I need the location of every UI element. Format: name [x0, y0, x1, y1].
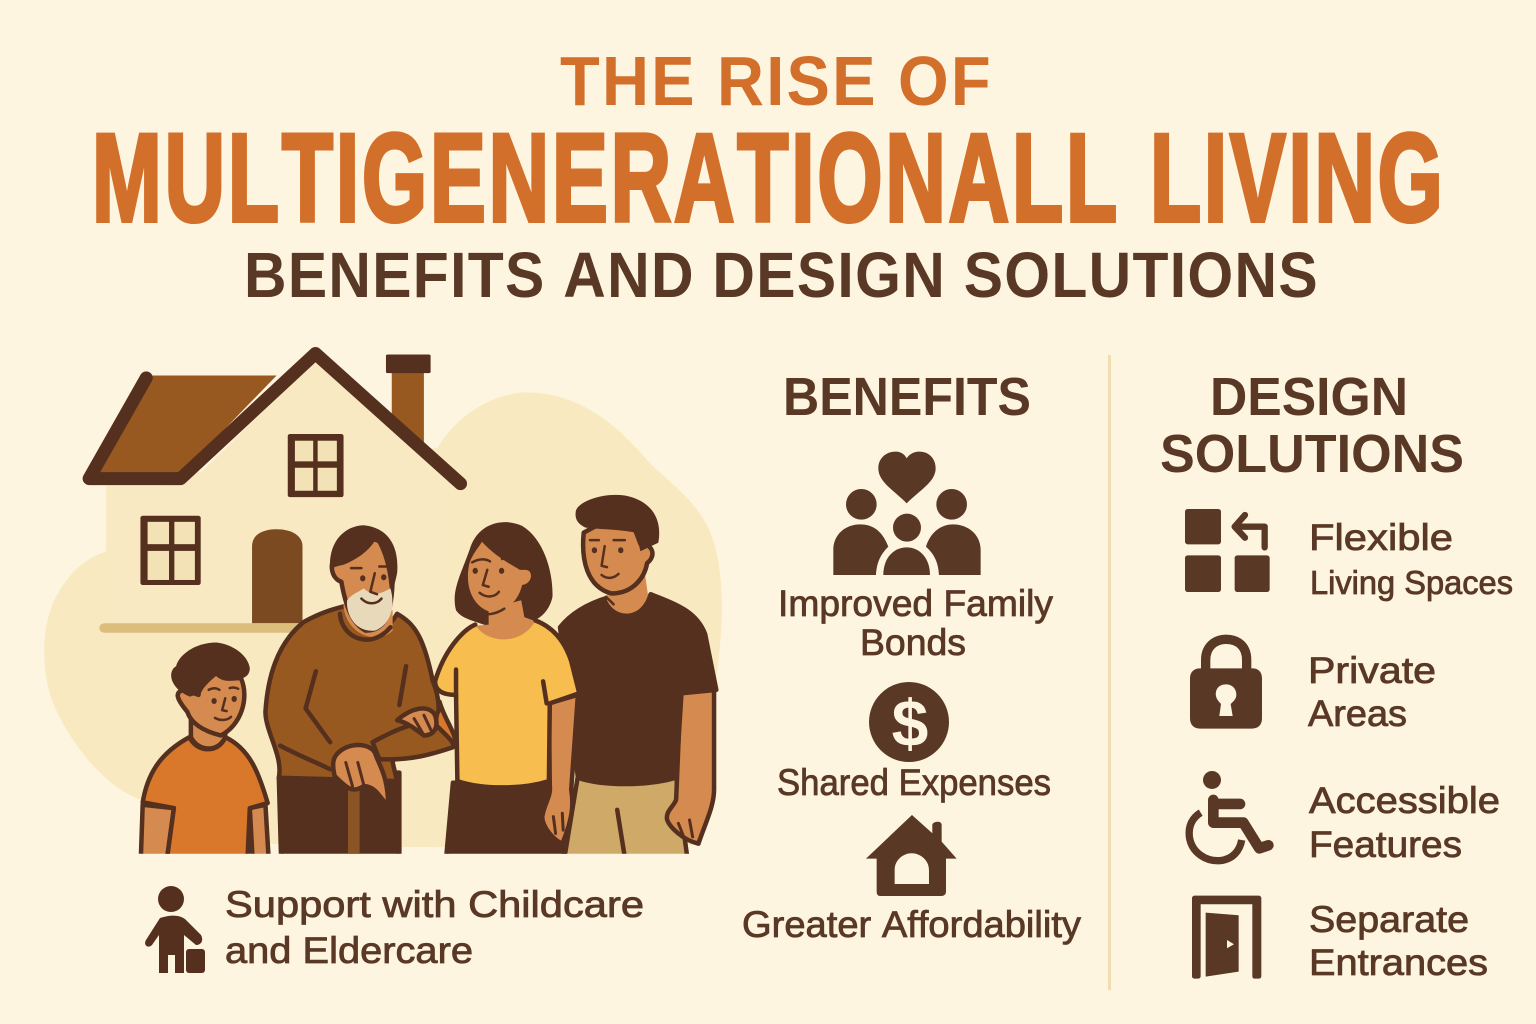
text: improved family bonds: [778, 583, 1054, 663]
title: THE RISE OF: [560, 43, 991, 121]
divider: [1108, 355, 1111, 990]
text: improved family bonds: Bonds: [860, 622, 966, 663]
icon: wheelchair: [1189, 771, 1268, 861]
heading: design solutions: DESIGN: [1210, 367, 1408, 427]
support text: and Eldercare: [225, 930, 473, 971]
icon: house: [866, 815, 957, 896]
text: shared expenses: Shared Expenses: [777, 762, 1051, 803]
house: [87, 354, 461, 633]
heading: design solutions: SOLUTIONS: [1160, 424, 1464, 484]
woman in yellow shirt: [433, 522, 579, 857]
title: BENEFITS AND DESIGN SOLUTIONS: [244, 240, 1318, 312]
text: flexible living spaces: [1309, 517, 1513, 601]
title: LIVING: [1150, 108, 1443, 248]
support text: Support with Childcare: [225, 884, 644, 925]
text: improved family bonds: Improved Family: [778, 583, 1054, 624]
background blob: [44, 392, 722, 848]
text: separate entrances: [1309, 899, 1488, 983]
grandfather with cane: [265, 525, 453, 857]
icon: dollar coin: [869, 682, 949, 762]
text: accessible features: Accessible: [1309, 780, 1500, 821]
icon: dollar coin: $: [892, 686, 928, 760]
text: private areas: Private: [1308, 650, 1436, 691]
icon: family with heart: [833, 452, 981, 575]
text: separate entrances: Separate: [1309, 899, 1469, 940]
heading: benefits: BENEFITS: [783, 367, 1031, 427]
text: private areas: [1308, 650, 1436, 734]
illustration: family and house: [44, 354, 722, 857]
text: flexible living spaces: Living Spaces: [1310, 564, 1513, 601]
icon: padlock: [1190, 639, 1262, 729]
heading: design solutions: [1160, 367, 1464, 484]
text: flexible living spaces: Flexible: [1309, 517, 1453, 558]
icon: flexible spaces: [1185, 509, 1270, 592]
support text: [225, 884, 644, 971]
title: [92, 43, 1443, 312]
text: private areas: Areas: [1308, 693, 1407, 734]
text: greater affordability: Greater Affordability: [742, 904, 1082, 945]
man in dark shirt: [560, 495, 716, 857]
text: accessible features: Features: [1309, 824, 1462, 865]
boy in orange shirt: [141, 643, 269, 857]
icon: person with suitcase: [145, 886, 205, 973]
text: accessible features: [1309, 780, 1500, 865]
title: MULTIGENERATIONALL: [92, 108, 1117, 248]
text: separate entrances: Entrances: [1309, 942, 1488, 983]
icon: door: [1192, 896, 1261, 979]
